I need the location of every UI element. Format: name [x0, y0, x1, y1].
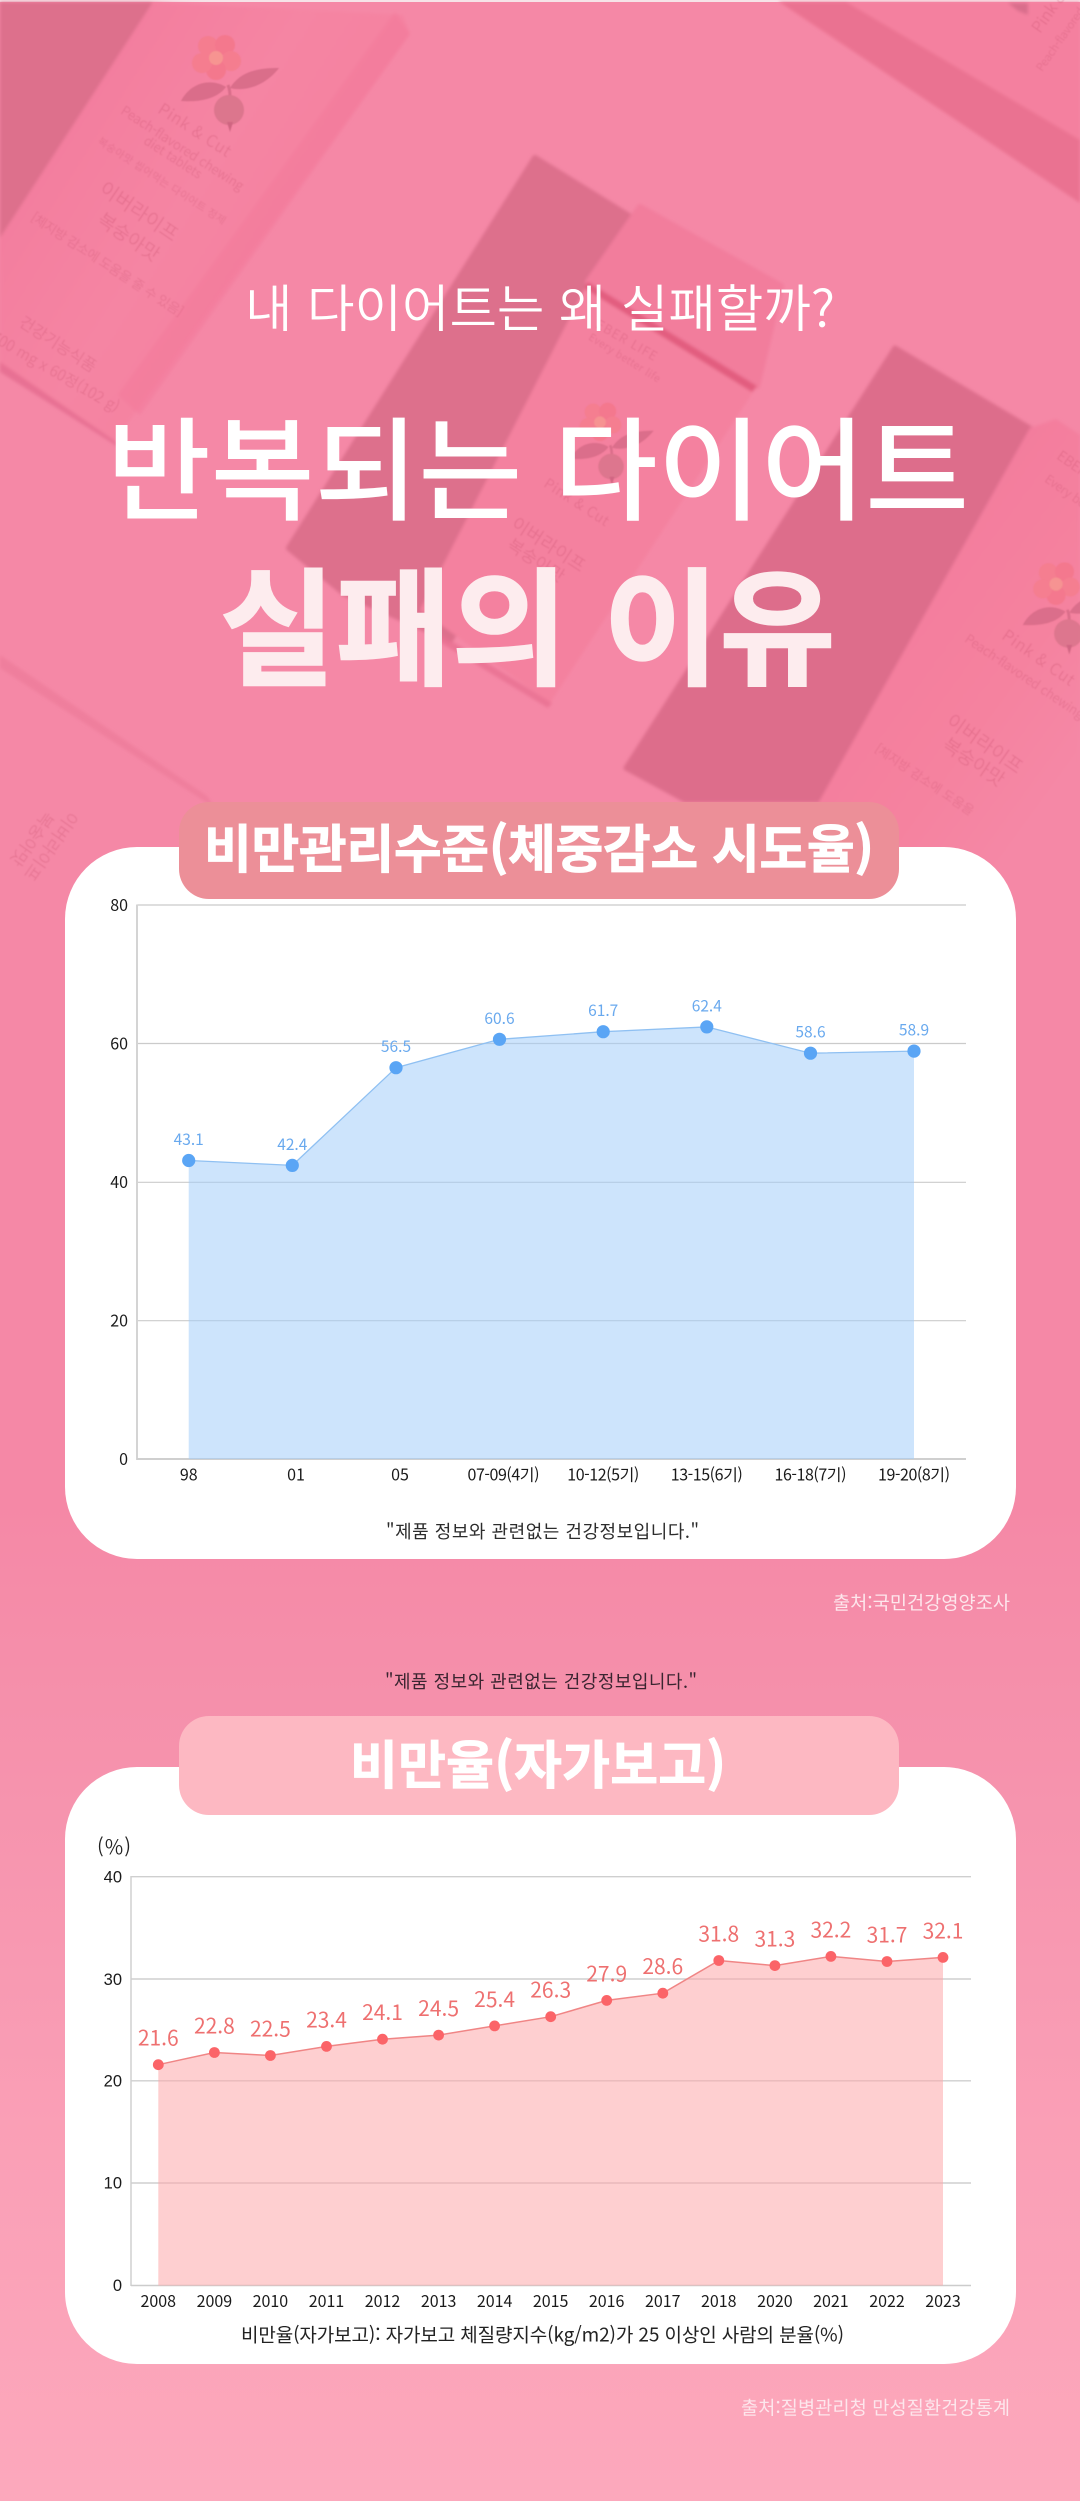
area chart: self-reported obesity rate: 2008: [141, 2288, 176, 2312]
background photo: diet product boxes: 복숭아맛: [938, 731, 1011, 792]
area chart: self-reported obesity rate: 28.6: [642, 1951, 683, 1981]
area chart: self-reported obesity rate: 31.7: [867, 1920, 907, 1950]
area chart: weight loss attempt rate: 0: [119, 1446, 128, 1470]
area chart: weight loss attempt rate: 62.4: [692, 994, 722, 1016]
area chart: weight loss attempt rate: 10-12(5기): [567, 1462, 639, 1486]
disclaimer note between panels: "제품 정보와 관련없는 건강정보입니다.": [385, 1668, 697, 1694]
area chart: self-reported obesity rate: 24.1: [362, 1997, 403, 2027]
area chart: self-reported obesity rate: 2021: [813, 2288, 849, 2312]
panel heading: self-reported obesity: [179, 1716, 899, 1815]
area chart: weight loss attempt rate: 60.6: [484, 1007, 515, 1029]
area chart: weight loss attempt rate: 01: [287, 1462, 305, 1486]
background photo: diet product boxes: Pink & Cut: [998, 622, 1080, 690]
area chart: self-reported obesity rate: 2016: [589, 2288, 625, 2312]
area chart: self-reported obesity rate: 2015: [533, 2288, 569, 2312]
background photo: diet product boxes: Peach-flavored chewing: [118, 100, 248, 194]
area chart: weight loss attempt rate: 13-15(6기): [671, 1462, 743, 1486]
background photo: diet product boxes: 이버라이프: [19, 807, 85, 887]
area chart: self-reported obesity rate: 32.1: [923, 1915, 963, 1945]
area chart: self-reported obesity rate: (%): [97, 1831, 131, 1860]
area chart: weight loss attempt rate: 56.5: [381, 1035, 411, 1057]
area chart: self-reported obesity rate: 2011: [309, 2288, 344, 2312]
area chart: self-reported obesity rate: 31.8: [698, 1918, 739, 1948]
area chart: self-reported obesity rate: 32.2: [810, 1914, 851, 1944]
area chart: self-reported obesity rate: 2020: [757, 2288, 793, 2312]
background photo: diet product boxes: EBER LIFE: [593, 314, 661, 364]
area chart: self-reported obesity rate: 10: [104, 2174, 122, 2192]
panel: weight-management chart card: [65, 802, 1016, 1559]
background photo: diet product boxes: 이버라이프: [942, 707, 1029, 779]
area chart: weight loss attempt rate: 07-09(4기): [468, 1462, 540, 1486]
area chart: self-reported obesity rate: 2010: [253, 2288, 288, 2312]
panel heading: weight loss attempt rate: 비만관리수준(체중감소 시도율): [204, 808, 874, 883]
background photo: diet product boxes: 복숭아맛: [503, 531, 571, 587]
area chart: self-reported obesity rate: 0: [113, 2277, 122, 2295]
area chart: self-reported obesity rate: 2023: [925, 2288, 961, 2312]
area chart: self-reported obesity rate: 2014: [477, 2288, 512, 2312]
area chart: self-reported obesity rate: 24.5: [418, 1993, 459, 2023]
source: chronic disease statistics: 출처:질병관리청 만성질환건강통계: [741, 2394, 1010, 2420]
area chart: weight loss attempt rate: 98: [180, 1462, 198, 1486]
area chart: self-reported obesity rate: 2009: [197, 2288, 232, 2312]
area chart: weight loss attempt rate: 05: [391, 1462, 409, 1486]
chart caption: definition of self-reported obesity: 비만율(자가보고): 자가보고 체질량지수(kg/m2)가 25 이상인 사람의 분율(%): [241, 2320, 844, 2348]
area chart: self-reported obesity rate: 27.9: [586, 1958, 627, 1988]
area chart: weight loss attempt rate: 40: [110, 1169, 128, 1193]
area chart: weight loss attempt rate: 42.4: [277, 1133, 308, 1155]
area chart: weight loss attempt rate: 58.6: [795, 1021, 826, 1043]
background photo: diet product boxes: 복숭아맛: [5, 807, 61, 872]
heading: main title line 2: 실패의 이유: [220, 528, 836, 712]
area chart: self-reported obesity rate: 2012: [365, 2288, 400, 2312]
area chart: weight loss attempt rate: 61.7: [588, 999, 618, 1021]
area chart: weight loss attempt rate: 20: [110, 1308, 128, 1332]
source: national health survey: 출처:국민건강영양조사: [833, 1588, 1010, 1616]
background photo: diet product boxes: 건강기능식품: [15, 309, 102, 377]
area chart: self-reported obesity rate: 26.3: [530, 1975, 571, 2005]
heading: subtitle: 내 다이어트는 왜 실패할까?: [245, 268, 835, 342]
area chart: self-reported obesity rate: 2013: [421, 2288, 456, 2312]
background photo: diet product boxes: [0, 0, 1080, 887]
background photo: diet product boxes: 이버라이프: [95, 173, 185, 247]
area chart: self-reported obesity rate: 40: [104, 1868, 122, 1886]
background photo: diet product boxes: diet tablets: [141, 130, 207, 182]
area chart: weight loss attempt rate: 43.1: [174, 1128, 204, 1150]
area chart: self-reported obesity rate: 30: [104, 1971, 122, 1989]
area chart: self-reported obesity rate: 23.4: [306, 2004, 347, 2034]
disclaimer note: "제품 정보와 관련없는 건강정보입니다.": [386, 1518, 699, 1544]
background photo: diet product boxes: 복숭아맛 씹어먹는 다이어트 정제: [95, 133, 229, 227]
area chart: self-reported obesity rate: 22.8: [194, 2010, 235, 2040]
area chart: weight loss attempt rate: 19-20(8기): [878, 1462, 950, 1486]
area chart: self-reported obesity rate: [97, 1831, 971, 2312]
heading: main title line 1: 반복되는 다이어트: [107, 382, 969, 544]
area chart: self-reported obesity rate: 20: [104, 2072, 122, 2090]
panel heading: self-reported obesity: 비만율(자가보고): [350, 1724, 726, 1799]
background photo: diet product boxes: 이버라이프: [507, 510, 591, 578]
area chart: weight loss attempt rate: 60: [110, 1030, 128, 1054]
panel: self-reported obesity chart card: [65, 1716, 1016, 2364]
area chart: weight loss attempt rate: 80: [110, 892, 128, 916]
area chart: weight loss attempt rate: 16-18(7기): [774, 1462, 846, 1486]
area chart: self-reported obesity rate: 2018: [701, 2288, 737, 2312]
background photo: diet product boxes: Pink & Cut: [540, 473, 613, 531]
background photo: diet product boxes: 복숭아맛: [93, 206, 166, 267]
area chart: self-reported obesity rate: 2017: [645, 2288, 681, 2312]
area chart: self-reported obesity rate: 31.3: [754, 1924, 795, 1954]
background photo: diet product boxes: Pink & Cut: [154, 96, 237, 162]
background photo: diet product boxes: Every better life: [586, 329, 664, 385]
area chart: self-reported obesity rate: 21.6: [138, 2023, 179, 2053]
area chart: weight loss attempt rate: 58.9: [899, 1019, 929, 1041]
area chart: self-reported obesity rate: 25.4: [474, 1984, 515, 2014]
area chart: self-reported obesity rate: 22.5: [250, 2014, 291, 2044]
background photo: diet product boxes: [체지방 감소에 도움을 줄 수 있음]: [28, 207, 187, 320]
area chart: weight loss attempt rate: [110, 892, 966, 1486]
background photo: diet product boxes: [체지방 감소에 도움을: [872, 739, 979, 819]
area chart: self-reported obesity rate: 2022: [869, 2288, 905, 2312]
